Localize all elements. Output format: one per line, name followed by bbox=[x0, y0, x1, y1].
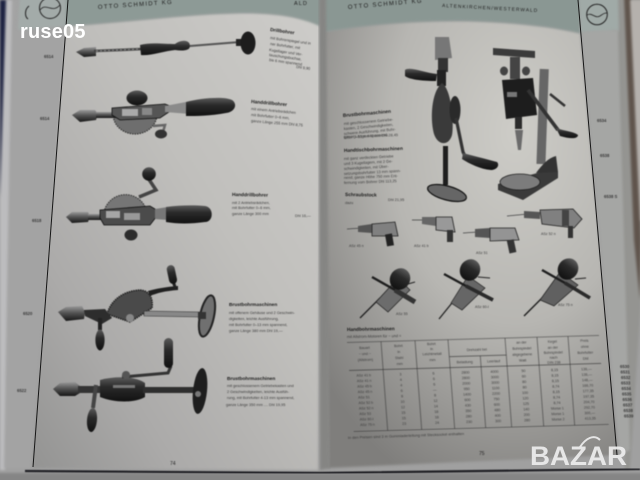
table rows: 600 bbox=[494, 403, 500, 407]
table header: DM bbox=[583, 357, 589, 361]
text: Handtischbohrmaschinen: mit ganz verdeckten Getriebe bbox=[344, 154, 394, 161]
text: Schraubstock bbox=[345, 192, 404, 205]
table header: Watt bbox=[519, 359, 527, 363]
table rows: 750 bbox=[493, 397, 500, 402]
text: Brustbohrmaschinen 2: Brustbohrmaschinen bbox=[227, 376, 275, 382]
table rows: 6 bbox=[432, 372, 435, 376]
text: Handtischbohrmaschinen: Handtischbohrmaschinen bbox=[344, 146, 403, 154]
text: Handtischbohrmaschinen: fernung vom Bohrer Dhl 113,25 bbox=[344, 179, 397, 185]
table header: DIN 238 bbox=[547, 361, 561, 365]
table rows: ASz 52 b bbox=[358, 401, 373, 405]
table rows: 8,15 bbox=[551, 368, 558, 372]
part numbers right column: 6538 bbox=[600, 153, 610, 158]
table rows: Morse 1 bbox=[551, 412, 564, 416]
table rows: 413,35 bbox=[585, 417, 596, 421]
table header: Bohrspindel bbox=[512, 346, 532, 351]
text: Drillbohrer: ner Bohrfutter, mit bbox=[270, 42, 301, 50]
part number list right margin: 6539 bbox=[624, 414, 634, 418]
text: Brustbohrmaschinen 1: Brustbohrmaschinen bbox=[229, 302, 277, 308]
icon: small drill ASz 50 n: ASz 52 n bbox=[541, 232, 556, 236]
table header: Bohrt bbox=[427, 342, 436, 346]
table rows: 18 bbox=[435, 416, 439, 420]
table header: mm bbox=[397, 362, 403, 366]
text: Schraubstock: Schraubstock bbox=[345, 192, 377, 199]
icon: small drill ASz 51 bbox=[463, 228, 519, 255]
table rows: 950 bbox=[464, 387, 470, 391]
table header: Bohrfutter bbox=[577, 351, 594, 355]
table header: nach bbox=[550, 356, 558, 360]
text: Brustbohrmaschinen 2: mit geschlossenem Getriebekasten und bbox=[227, 384, 294, 388]
table rows: 8,74 bbox=[553, 396, 560, 400]
part number list right margin: 6532 bbox=[621, 375, 631, 380]
right page header band bbox=[324, 0, 580, 33]
table rows: 177,35 bbox=[583, 389, 594, 394]
table header: Stahl bbox=[395, 356, 404, 360]
text: Drillbohrer bbox=[269, 27, 311, 71]
table rows: 2800 bbox=[461, 371, 470, 375]
table rows: ASz 51 bbox=[358, 395, 370, 400]
table rows: 230 bbox=[466, 420, 472, 424]
table header: Bauart bbox=[359, 346, 370, 350]
table rows: ASz 45 n bbox=[358, 390, 372, 394]
text: Brustbohrmaschinen right: mit geschlossenem Getriebe- bbox=[344, 118, 394, 126]
table rows: 430 bbox=[465, 404, 471, 408]
table header: an der bbox=[548, 346, 559, 350]
icon: Handdrillbohrer tool 1 bbox=[72, 90, 235, 138]
icon: Brustbohrmaschine tool 2 bbox=[53, 338, 209, 432]
table rows: 350 bbox=[465, 409, 472, 413]
left page margin header tint bbox=[18, 0, 70, 30]
table header: Kegel bbox=[548, 340, 557, 344]
table header: ~ und ~ bbox=[359, 352, 371, 356]
table rows: ASz 41 n bbox=[357, 379, 372, 383]
part number: 6522: 6522 bbox=[17, 388, 27, 393]
table rows: 1100 bbox=[492, 386, 500, 391]
table rows: 50 bbox=[521, 369, 526, 373]
table rows: 280 bbox=[466, 415, 472, 419]
text: Handbohrmaschinen table heading: mit Allstrom-Motoren für ~ und = bbox=[347, 334, 402, 339]
table rows: 166,70 bbox=[582, 384, 593, 388]
table rows: 8,74 bbox=[553, 401, 561, 405]
text: Drillbohrer: tauschungsbuchse, bbox=[269, 53, 302, 62]
text: Drillbohrer: Dhl 9,90 bbox=[296, 65, 310, 71]
header: left page: OTTO SCHMIDT KG bbox=[98, 0, 173, 11]
table rows: Morse 1 bbox=[551, 407, 564, 411]
part number: 6518: 6518 bbox=[32, 218, 42, 223]
icon: large drill ASz 60-I: ASz 60-I bbox=[475, 305, 489, 309]
table rows: 23 bbox=[402, 422, 406, 426]
right page body bbox=[324, 21, 618, 468]
part numbers right column: 6538 S bbox=[604, 194, 617, 199]
text: Handdrillbohrer 2: mit Bohrfutter 0–6 mm, bbox=[232, 206, 271, 210]
table rows: ASz 45 b bbox=[357, 384, 372, 389]
table rows: ASz 52 n bbox=[359, 406, 374, 411]
table rows: 300,— bbox=[584, 411, 596, 416]
part number list right margin bbox=[620, 364, 634, 418]
table rows: 80 bbox=[522, 380, 526, 384]
text: Brustbohrmaschinen 2: rung, mit Bohrfutter 4-13 mm spannend, bbox=[227, 396, 294, 400]
table rows: 140 bbox=[523, 408, 530, 412]
text: Handbohrmaschinen table heading: Handbohrmaschinen bbox=[347, 326, 395, 333]
watermark: ruse05: ruse05 bbox=[20, 21, 86, 43]
table header: abgegebene bbox=[512, 352, 532, 357]
icon: large drill ASz 75 n bbox=[524, 254, 590, 316]
table rows: 148,— bbox=[582, 378, 593, 383]
table rows: 8,15 bbox=[551, 374, 559, 378]
table rows: Morse 2 bbox=[552, 418, 565, 422]
right page margin header tint bbox=[579, 0, 619, 33]
part number: 6514: 6514 bbox=[44, 54, 54, 59]
icon: bench drill press bbox=[493, 48, 578, 200]
icon: Brustbohrmaschine tool 1 bbox=[58, 264, 218, 350]
table rows: 14 bbox=[434, 405, 438, 409]
text: Handtischbohrmaschinen: nend, ganze Höhe 750 mm Ent- bbox=[344, 174, 399, 180]
table header: an der bbox=[516, 340, 527, 345]
part number list right margin: 6530 bbox=[620, 364, 630, 369]
part numbers right column bbox=[597, 118, 617, 199]
table rows: 8,15 bbox=[552, 379, 559, 383]
part number list right margin: 6538 bbox=[624, 408, 633, 413]
table rows: 60 bbox=[522, 375, 526, 379]
text: Brustbohrmaschinen 1 bbox=[229, 302, 296, 333]
text: Brustbohrmaschinen price: ganze Länge 440 mm Dhl 28,45 bbox=[344, 133, 398, 139]
text: Handdrillbohrer 2: mit 2 Antriebsrädchen, bbox=[232, 201, 270, 205]
text: Brustbohrmaschinen 1: ganze Länge 380 mm Dhl 19,— bbox=[229, 329, 283, 333]
book gutter bbox=[319, 0, 330, 470]
part number list right margin: 6533 bbox=[621, 380, 631, 386]
part number list right margin: 6536 bbox=[622, 397, 632, 402]
part number list right margin: 6531 bbox=[620, 370, 630, 374]
text: Brustbohrmaschinen 1: digkeiten, leichte Ausführung, bbox=[229, 317, 279, 321]
table rows: 200 bbox=[524, 413, 530, 417]
text: Drillbohrer: Kugellager und Ver- bbox=[269, 48, 303, 57]
icon: large drill ASz 55: ASz 55 bbox=[396, 312, 408, 316]
table rows: 80 bbox=[523, 386, 527, 390]
text: Drillbohrer: mit Bohrerspiegel und in bbox=[270, 36, 311, 46]
header: right page: ALTENKIRCHEN/WESTERWALD bbox=[442, 3, 538, 14]
table rows: 24 bbox=[435, 421, 439, 425]
icon: small drill ASz 50 n bbox=[507, 209, 582, 238]
text: Brustbohrmaschinen 2: 2 Geschwindigkeiten, leichte Ausfüh- bbox=[227, 390, 290, 394]
table header: Bohrspindel bbox=[544, 350, 563, 355]
text: Brustbohrmaschinen 2: ganze Länge 350 mm .... Dhl 19,95 bbox=[226, 403, 285, 407]
table rows: ASz 60-I bbox=[360, 417, 374, 422]
table rows: 6 bbox=[433, 383, 435, 387]
watermark: BAZAR: BAZAR bbox=[530, 441, 627, 471]
table rows: 2000 bbox=[462, 382, 470, 386]
right page outer margin bbox=[582, 30, 630, 455]
part number: 6514 second: 6514 bbox=[40, 116, 50, 121]
header: right page bbox=[348, 0, 607, 25]
text: Schraubstock: dazu bbox=[345, 201, 353, 205]
table rows: 480 bbox=[494, 408, 501, 413]
part number list right margin: 6534 bbox=[622, 386, 631, 391]
page number 74: 74 bbox=[170, 461, 176, 467]
table rows: 8 bbox=[401, 395, 403, 399]
part number: 6520: 6520 bbox=[23, 311, 33, 316]
table rows: 6 bbox=[401, 389, 403, 393]
table header: Bohrt bbox=[394, 344, 403, 348]
table rows: 4 bbox=[400, 378, 402, 382]
logo: right circle bbox=[587, 4, 607, 25]
icon: upright breast drill bbox=[405, 37, 498, 205]
page number 75: 75 bbox=[479, 451, 485, 457]
table rows: 8,74 bbox=[552, 385, 559, 389]
table rows: 300 bbox=[495, 419, 501, 424]
text: Brustbohrmaschinen 1: mit offenem Gehäuse und 2 Geschwin- bbox=[229, 311, 296, 315]
icon: large drill ASz 60-I bbox=[439, 255, 493, 319]
part numbers right column: 6534 bbox=[597, 118, 607, 123]
text: Brustbohrmaschinen 1: mit Bohrfutter 0–13 mm spannend, bbox=[229, 323, 287, 327]
table header: Preis bbox=[580, 339, 589, 343]
text: Brustbohrmaschinen right bbox=[343, 109, 397, 140]
table rows: 3 bbox=[399, 373, 402, 377]
table rows: ASz 53 bbox=[359, 412, 371, 416]
table rows: 400 bbox=[495, 414, 501, 418]
table rows: ASz 41 b bbox=[356, 373, 371, 378]
table rows: 8 bbox=[434, 394, 436, 398]
text: Brustbohrmaschinen 2 bbox=[226, 376, 294, 407]
text: Handdrillbohrer 2 bbox=[232, 192, 311, 218]
table header: in bbox=[430, 347, 433, 351]
table header: Belastung bbox=[457, 360, 473, 364]
table rows: 8,15 bbox=[553, 390, 560, 394]
text: Brustbohrmaschinen right: schwere Ausführung, mit Bohr- bbox=[344, 127, 397, 136]
text: Handdrillbohrer 1: Handdrillbohrer bbox=[251, 99, 287, 108]
text: Handdrillbohrer 1 bbox=[251, 99, 303, 128]
table rows: 292,70 bbox=[584, 406, 595, 410]
table rows: 12 bbox=[401, 406, 405, 410]
table rows: 120 bbox=[522, 397, 529, 401]
text: Brustbohrmaschinen right: futter 3–13 mm spannend, bbox=[344, 133, 388, 140]
part number list right margin: 6537 bbox=[623, 402, 633, 408]
icon: Handdrillbohrer tool 2 bbox=[66, 167, 212, 240]
table rows: 136,— bbox=[581, 367, 592, 372]
icon: large drill ASz 55 bbox=[360, 264, 415, 318]
table header: Leerlauf bbox=[487, 359, 500, 364]
specifications table bbox=[347, 335, 609, 432]
logo: left circle bbox=[26, 0, 60, 19]
table rows: 10 bbox=[400, 400, 405, 404]
table rows: — bbox=[433, 388, 437, 392]
table rows: 15 bbox=[402, 417, 406, 421]
table rows: 2800 bbox=[462, 376, 470, 380]
icon: Drillbohrer tool bbox=[76, 32, 256, 57]
icon: small drill ASz 51: ASz 51 bbox=[476, 251, 488, 255]
text: Handdrillbohrer 1: ganze Länge 255 mm Dhl 8,75 bbox=[251, 119, 303, 128]
table rows: 3000 bbox=[491, 381, 499, 385]
part number list right margin: 6535 bbox=[622, 392, 632, 396]
header: left page bbox=[26, 0, 308, 19]
table header: Leichtmetall bbox=[422, 352, 442, 356]
header: left page: ALD bbox=[294, 1, 308, 7]
left page body bbox=[32, 13, 320, 470]
table rows: 204,70 bbox=[583, 400, 595, 405]
book bottom edge bbox=[25, 469, 640, 473]
text: Brustbohrmaschinen right: kasten, 2 Geschwindigkeiten, bbox=[344, 123, 393, 131]
icon: large drill ASz 75 n: ASz 75 n bbox=[558, 303, 573, 307]
left page header band bbox=[66, 0, 322, 26]
table header bbox=[356, 338, 595, 370]
table rows: 100 bbox=[522, 391, 528, 395]
icon: small drill ASz 45 n bbox=[347, 222, 398, 248]
table rows: 12 bbox=[433, 399, 438, 403]
text: Handtischbohrmaschinen bbox=[344, 146, 403, 185]
table rows: 18 bbox=[434, 410, 439, 414]
text: Schraubstock: Dhl 21,95 bbox=[388, 198, 404, 202]
icon: small drill ASz 41 n bbox=[412, 217, 455, 248]
text: Handtischbohrmaschinen: und 3 Kugellagern, mit 2 Ge- bbox=[344, 159, 393, 166]
table rows: 280 bbox=[524, 419, 530, 423]
text: Handdrillbohrer 1: mit einem Antriebsrädchen bbox=[251, 107, 296, 115]
table rows: 4 bbox=[400, 384, 402, 388]
text: Handdrillbohrer 2: Dhl 16,— bbox=[295, 214, 311, 218]
table rows: 4000 bbox=[490, 370, 499, 374]
text: Handtischbohrmaschinen: setzungsbohrfutter 13 mm spann- bbox=[344, 169, 401, 176]
table header: ohne bbox=[581, 345, 589, 349]
table header: (Allstrom) bbox=[358, 358, 373, 362]
table header: in bbox=[397, 350, 400, 354]
table rows: 6 bbox=[433, 377, 435, 381]
table header: Drehzahl bei bbox=[467, 348, 487, 352]
table rows: 136,— bbox=[581, 373, 593, 377]
text: Handdrillbohrer 2: ganze Länge 300 mm bbox=[232, 212, 269, 216]
text: Handbohrmaschinen table heading bbox=[347, 326, 402, 339]
text: Handtischbohrmaschinen: schwindigkeiten, mit Über- bbox=[344, 165, 389, 171]
table rows: 1400 bbox=[463, 393, 471, 397]
text: Handdrillbohrer 2: Handdrillbohrer bbox=[232, 192, 268, 199]
text: Drillbohrer: bis 6 mm spannend bbox=[269, 58, 302, 67]
table rows: 125 bbox=[523, 402, 529, 406]
table rows: ASz 75 n bbox=[360, 423, 375, 427]
icon: small drill ASz 45 n: ASz 45 n bbox=[349, 244, 364, 248]
table header: mm bbox=[429, 358, 436, 362]
text: Handdrillbohrer 1: mit Bohrfutter 0–6 mm, bbox=[251, 113, 290, 120]
text: Brustbohrmaschinen right: Brustbohrmaschinen bbox=[343, 109, 391, 119]
table rows: 600 bbox=[464, 398, 471, 402]
table rules bbox=[347, 335, 609, 432]
text: table footnote: In den Preisen sind 3 m Gummiaderleitung mit Stecksockel enthalten bbox=[348, 432, 464, 440]
table rows: 197,35 bbox=[583, 395, 594, 399]
text: Drillbohrer: Drillbohrer bbox=[270, 27, 295, 36]
icon: small drill ASz 41 n: ASz 41 b bbox=[414, 244, 429, 248]
table rows: 2200 bbox=[492, 392, 500, 396]
table rows: 15 bbox=[401, 411, 406, 415]
table rows: 3000 bbox=[491, 375, 499, 380]
table rows bbox=[356, 367, 596, 427]
